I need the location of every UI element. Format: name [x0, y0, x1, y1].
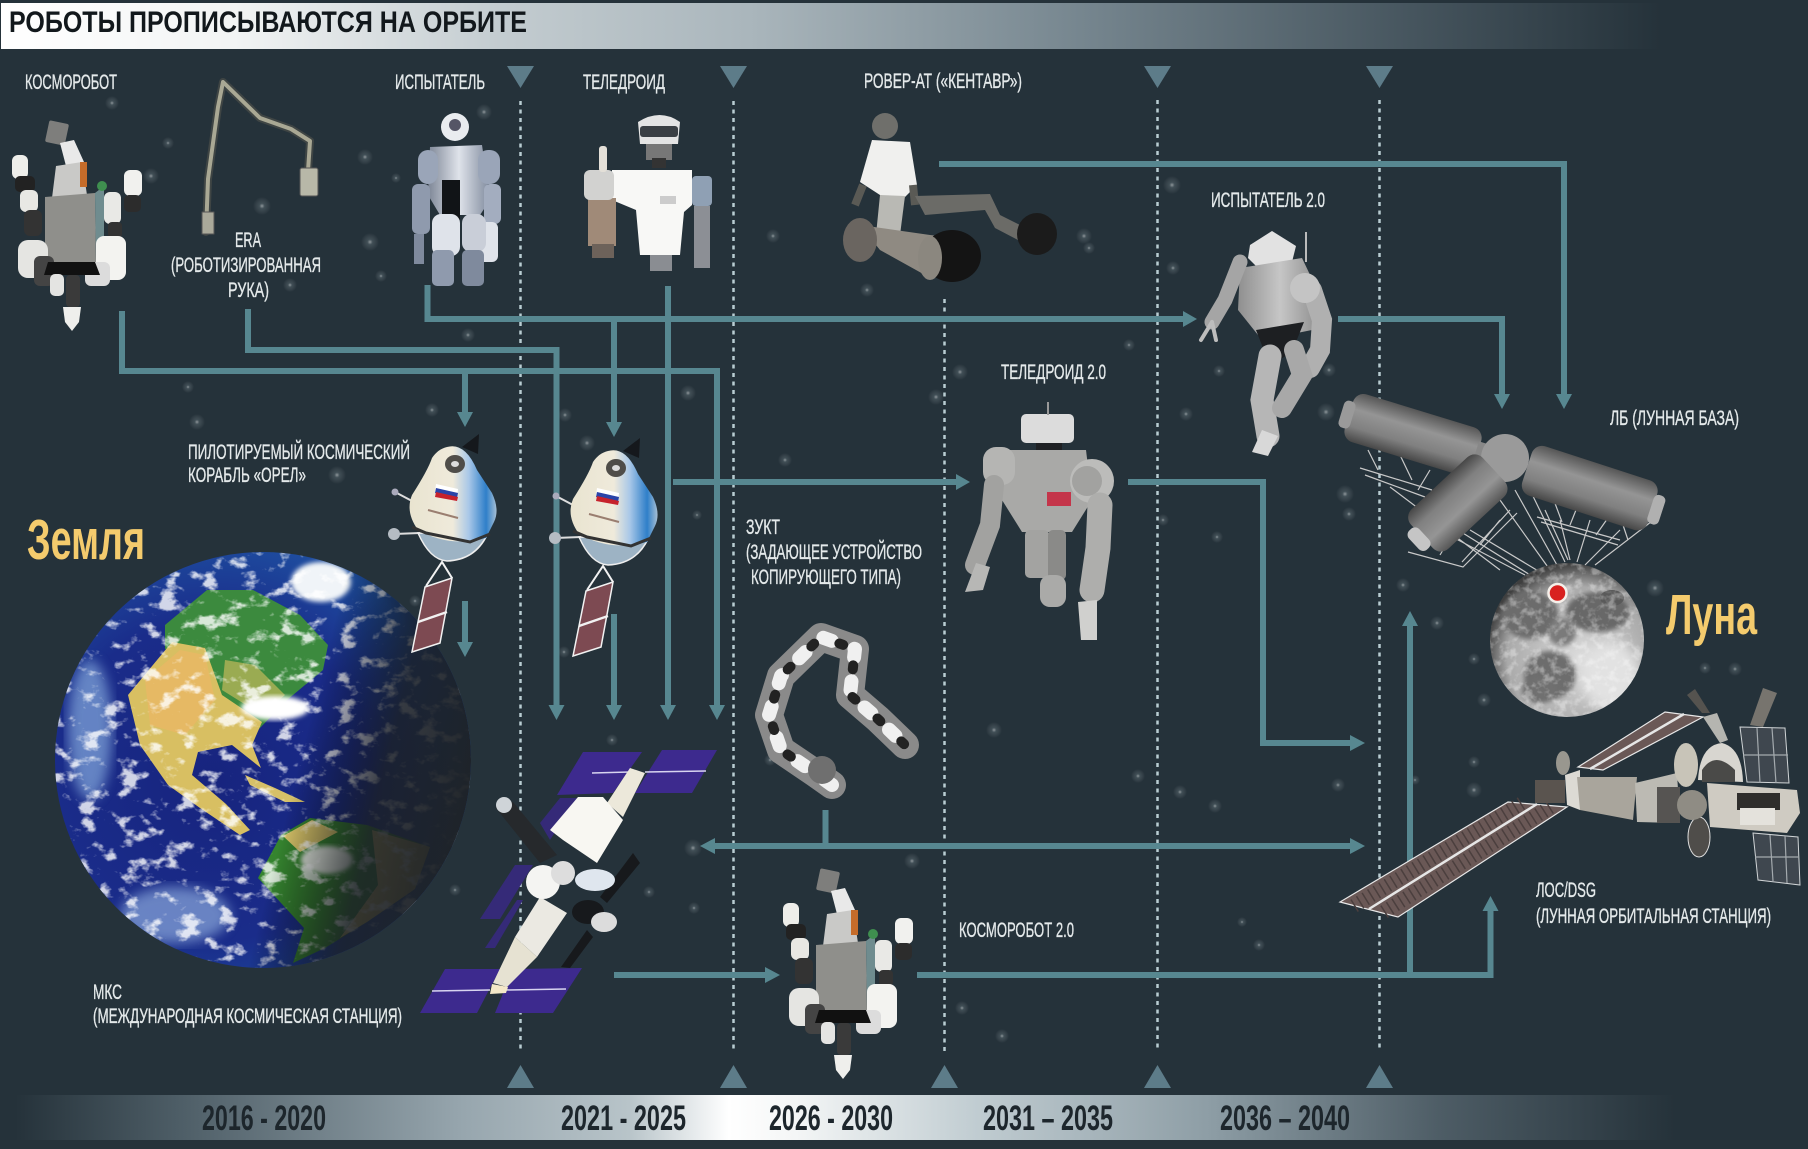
North America: Canada	[165, 590, 328, 730]
label: Zemlya: Земля	[27, 508, 145, 572]
arrow: Teledroid 2.0 route	[1128, 482, 1365, 751]
label: ZUKT: ЗУКТ	[746, 516, 780, 539]
illustration: LOS/DSG lunar orbital station	[1340, 688, 1800, 917]
label: Orel spacecraft: ПИЛОТИРУЕМЫЙ КОСМИЧЕСКИЙ	[188, 440, 410, 464]
label: Kosmorobot 2.0: КОСМОРОБОТ 2.0	[959, 919, 1074, 942]
title: РОБОТЫ ПРОПИСЫВАЮТСЯ НА ОРБИТЕ	[9, 6, 527, 39]
Caribbean islands	[245, 775, 305, 802]
label: ERA: ERA	[235, 229, 261, 252]
illustration: MKS space station	[420, 750, 717, 1013]
year 2021-2025: 2021 - 2025	[561, 1099, 686, 1138]
label: Lunar base: ЛБ (ЛУННАЯ БАЗА)	[1610, 407, 1739, 430]
label: Kosmorobot: КОСМОРОБОТ	[25, 71, 117, 94]
arrow: Rover route	[939, 164, 1572, 409]
header band	[1, 3, 1661, 49]
label: LOS/DSG: ЛОС/DSG	[1536, 879, 1596, 902]
arrows: Teledroid routes	[660, 286, 970, 720]
illustration: Kosmorobot 2.0	[783, 868, 913, 1079]
timeline band	[15, 1095, 1675, 1140]
year 2036-2040: 2036 – 2040	[1220, 1099, 1350, 1138]
illustration: Rover-AT Kentavr	[843, 113, 1057, 282]
star field	[105, 96, 1742, 1043]
label: Luna: Луна	[1666, 583, 1758, 647]
arrows: Kosmorobot routes	[122, 311, 725, 720]
illustration: Kosmorobot	[12, 120, 142, 331]
lunar base module two	[1519, 443, 1670, 536]
shaded limb	[254, 572, 471, 968]
illustration: Moon	[1490, 562, 1644, 718]
label: MKS: (МЕЖДУНАРОДНАЯ КОСМИЧЕСКАЯ СТАНЦИЯ)	[93, 1005, 402, 1028]
arrows: Ispytatel routes	[428, 285, 1197, 720]
illustration: Ispytatel robot	[412, 113, 501, 286]
label: Ispytatel: ИСПЫТАТЕЛЬ	[395, 71, 485, 94]
label: ZUKT: КОПИРУЮЩЕГО ТИПА)	[751, 566, 901, 589]
illustration: ZUKT exoskeleton	[769, 637, 905, 785]
illustration: ERA robotic arm	[202, 82, 318, 234]
year 2026-2030: 2026 - 2030	[769, 1099, 893, 1138]
lunar base module one	[1334, 389, 1498, 482]
label: ERA	[171, 229, 321, 302]
period divider lines	[520, 100, 1380, 1052]
label: Teledroid 2.0: ТЕЛЕДРОИД 2.0	[1001, 361, 1106, 384]
bottom period markers	[507, 1065, 1393, 1088]
illustration: Teledroid robot	[584, 115, 712, 271]
landing site marker	[1548, 584, 1566, 602]
arrow: ZUKT two-way route	[700, 810, 1365, 854]
illustration: Earth	[55, 552, 471, 968]
arrow: Ispytatel 2.0 route	[1338, 319, 1510, 409]
North America: USA and Mexico	[128, 642, 262, 835]
label: MKS: МКС	[93, 981, 122, 1004]
label: ERA: (РОБОТИЗИРОВАННАЯ	[171, 254, 321, 277]
label: ERA: РУКА)	[228, 279, 269, 302]
label: Orel spacecraft	[188, 440, 410, 487]
year 2016-2020: 2016 - 2020	[202, 1099, 326, 1138]
label: Rover-AT: РОВЕР-АТ («КЕНТАВР»)	[864, 70, 1022, 93]
arrow: MKS to Kosmorobot 2.0	[614, 967, 780, 983]
cloud masses	[291, 562, 351, 602]
label: ZUKT	[746, 516, 922, 589]
arrow: ERA route	[248, 309, 564, 720]
arrows: Kosmorobot 2.0 routes	[917, 611, 1498, 975]
illustration: Teledroid 2.0 robot	[965, 402, 1114, 640]
illustration: capsule Orel (second)	[549, 438, 658, 656]
label: MKS	[93, 981, 402, 1028]
South America	[258, 818, 430, 963]
label: Teledroid: ТЕЛЕДРОИД	[583, 71, 665, 94]
label: LOS/DSG	[1536, 879, 1771, 928]
year 2031-2035: 2031 – 2035	[983, 1099, 1113, 1138]
label: ZUKT: (ЗАДАЮЩЕЕ УСТРОЙСТВО	[746, 540, 922, 564]
lunar base module three	[1396, 450, 1512, 564]
illustration: Ispytatel 2.0 robot	[1201, 231, 1322, 456]
label: Ispytatel 2.0: ИСПЫТАТЕЛЬ 2.0	[1211, 189, 1325, 212]
label: Orel spacecraft: КОРАБЛЬ «ОРЕЛ»	[188, 464, 306, 487]
top period markers	[507, 66, 1393, 88]
illustration: Lunar base	[1334, 389, 1670, 578]
illustration: capsule Orel (first)	[388, 434, 497, 652]
